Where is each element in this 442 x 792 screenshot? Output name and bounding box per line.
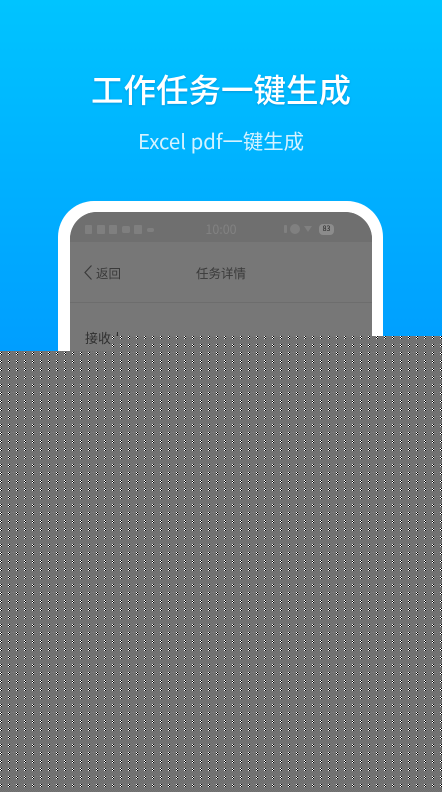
back arrow: [84, 265, 92, 280]
title: 工作任务一键生成: [91, 65, 351, 112]
mosaic redaction: [0, 336, 442, 792]
mosaic main area: [0, 351, 442, 792]
battery: 83: [323, 224, 330, 234]
system icons: [284, 224, 312, 234]
phone frame: [58, 201, 383, 371]
divider: [70, 302, 372, 303]
back label: 返回: [96, 263, 121, 282]
clock: 10:00: [205, 219, 237, 238]
status bar: [70, 212, 372, 242]
battery: [319, 224, 334, 235]
status icons: [85, 225, 154, 234]
subtitle: Excel pdf一键生成: [138, 125, 304, 155]
mosaic upper band: [112, 336, 442, 351]
background gradient: [0, 0, 442, 360]
phone screen: [70, 212, 372, 371]
nav title: 任务详情: [196, 263, 246, 282]
receiver label: 接收人: [85, 328, 124, 347]
